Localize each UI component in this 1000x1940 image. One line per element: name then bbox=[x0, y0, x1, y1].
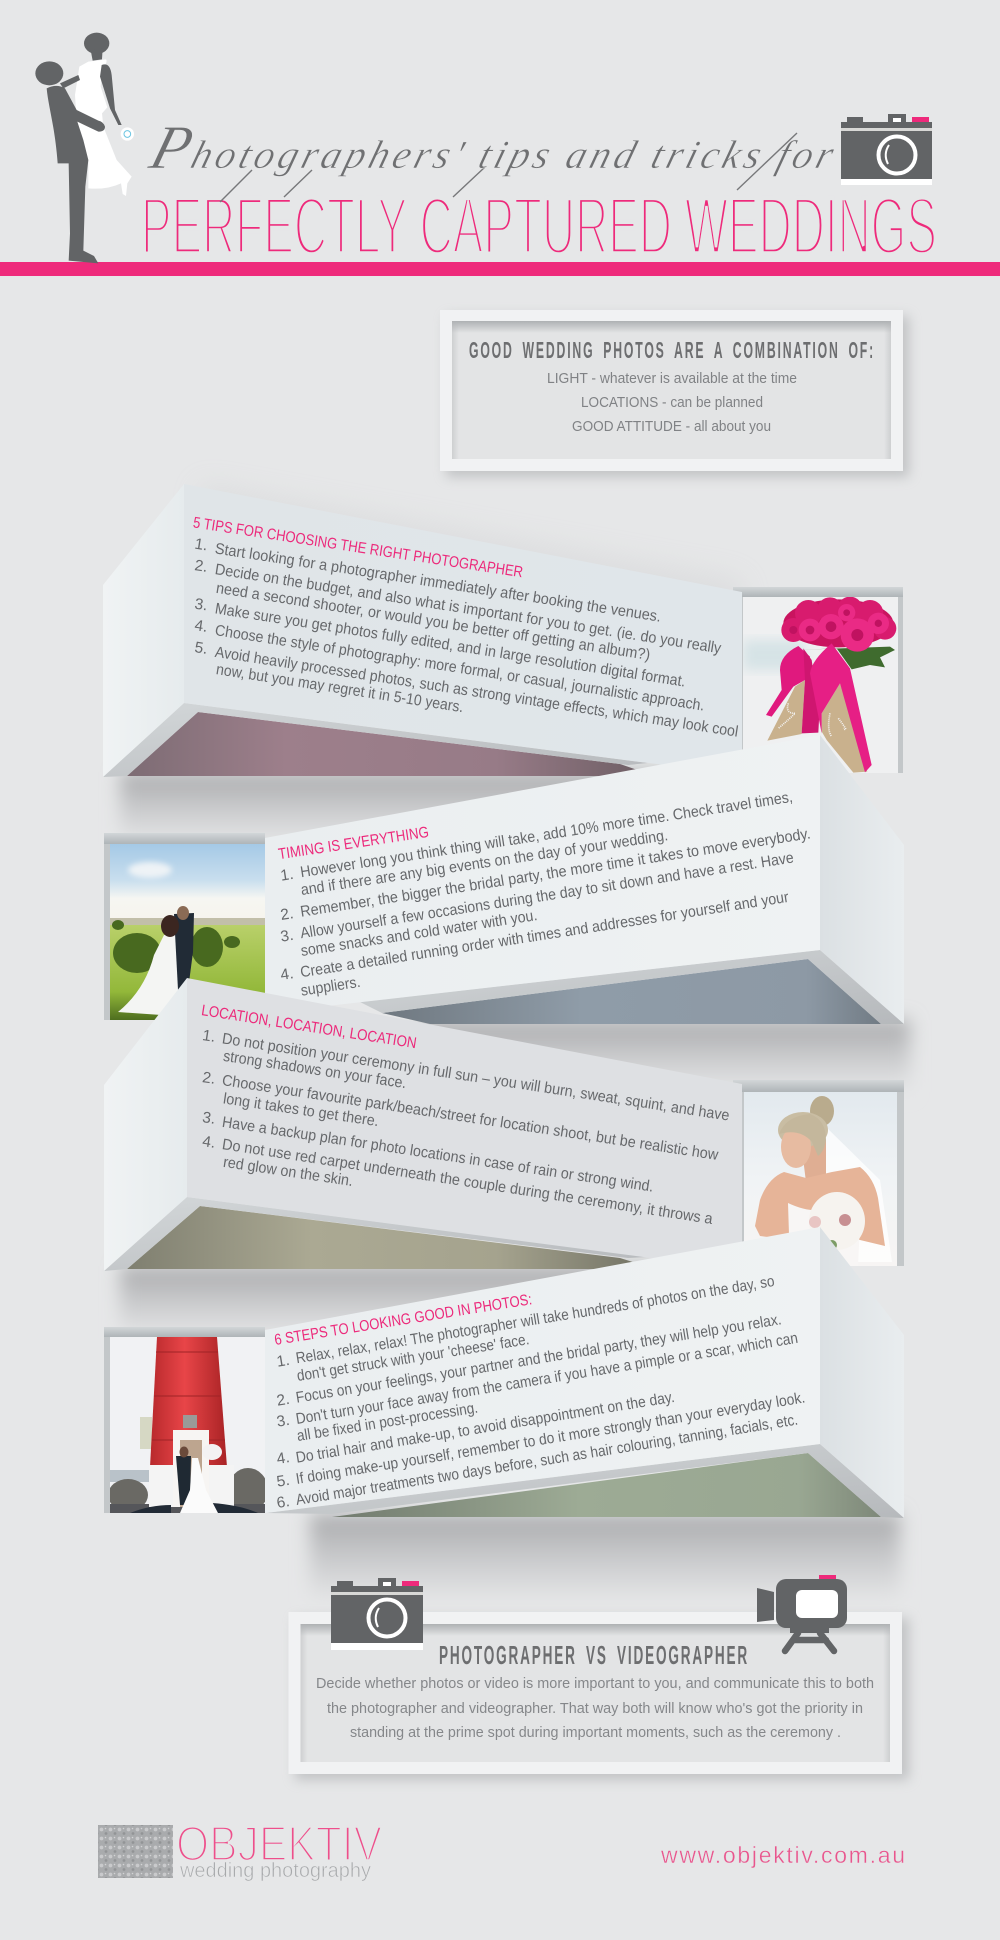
heading: location: LOCATION, LOCATION, LOCATION bbox=[200, 1002, 418, 1052]
photo: pink shoes and bouquet bbox=[733, 587, 903, 773]
tips list: 4. bbox=[193, 617, 209, 636]
steps list: Do trial hair and make-up, to avoid disappointment on the day. bbox=[295, 1389, 676, 1467]
tips list: Decide on the budget, and also what is important for you to get. (ie. do you really bbox=[214, 561, 722, 657]
steps list: Don't turn your face away from the camera if you have a pimple or a scar, which can bbox=[295, 1330, 799, 1428]
text: comparison body bbox=[316, 1675, 874, 1741]
steps list: Focus on your feelings, your partner and the bridal party, they will help you relax. bbox=[295, 1311, 783, 1407]
title: script line: Photographers' tips and tricks for bbox=[142, 113, 845, 182]
tips list: Start looking for a photographer immediately after booking the venues. bbox=[214, 540, 662, 626]
steps list: all be fixed in post-processing. bbox=[296, 1400, 479, 1445]
left face bbox=[104, 978, 187, 1271]
tips list bbox=[193, 536, 739, 741]
photo: red lighthouse bbox=[104, 1327, 268, 1513]
timing list: 3. bbox=[279, 927, 295, 946]
panel: timing is everything bbox=[265, 735, 904, 1024]
heading bar: pink rule bbox=[0, 262, 1000, 276]
timing list: 2. bbox=[279, 905, 295, 924]
icon: wedding couple silhouette bbox=[35, 33, 134, 263]
heading: timing: TIMING IS EVERYTHING bbox=[277, 824, 430, 863]
underside colour bbox=[127, 712, 655, 776]
panel: location, location, location bbox=[104, 978, 742, 1271]
steps list: don't get struck with your 'cheese' face. bbox=[296, 1331, 530, 1385]
left face bbox=[103, 484, 184, 777]
logo tagline: wedding photography bbox=[179, 1860, 371, 1882]
location list: 3. bbox=[201, 1109, 217, 1128]
website url: www.objektiv.com.au bbox=[660, 1842, 905, 1868]
timing list: and if there are any big events on the day of your wedding. bbox=[300, 827, 669, 899]
steps list: 6. bbox=[275, 1493, 291, 1512]
timing list: Create a detailed running order with times and addresses for yourself and your bbox=[299, 889, 790, 981]
location list: Choose your favourite park/beach/street for location shoot, but be realistic how bbox=[221, 1072, 720, 1164]
tips list: now, but you may regret it in 5-10 years. bbox=[215, 661, 465, 716]
text: comparison body: Decide whether photos or video is more important to you, and communicate this to both bbox=[316, 1675, 874, 1692]
timing list: some snacks and cold water with you. bbox=[300, 907, 538, 960]
location list: 1. bbox=[201, 1027, 217, 1046]
timing list: Allow yourself a few occasions during the day to sit down and have a rest. Have bbox=[299, 849, 795, 942]
front face bbox=[265, 1227, 820, 1513]
underside trim bbox=[104, 1197, 648, 1271]
tips list: 2. bbox=[193, 557, 209, 576]
heading: 6 steps: 6 STEPS TO LOOKING GOOD IN PHOTOS: bbox=[273, 1291, 533, 1349]
front face bbox=[265, 735, 820, 1013]
timing list bbox=[279, 789, 812, 1000]
logo mark bbox=[98, 1825, 173, 1878]
timing list: However long you think thing will take, add 10% more time. Check travel times, bbox=[299, 789, 794, 881]
steps list: Relax, relax, relax! The photographer will take hundreds of photos on the day, so bbox=[295, 1273, 776, 1367]
steps list: 4. bbox=[275, 1449, 291, 1468]
panel: 6 steps to looking good in photos bbox=[265, 1227, 904, 1518]
title: perfectly captured weddings: PERFECTLY CAPTURED WEDDINGS bbox=[141, 180, 937, 271]
timing list: suppliers. bbox=[300, 974, 362, 1000]
timing list: 4. bbox=[279, 965, 295, 984]
text: comparison body: standing at the prime spot during important moments, such as the ceremony . bbox=[350, 1724, 841, 1741]
text: comparison body: the photographer and videographer. That way both will know who's got the priority in bbox=[327, 1700, 863, 1717]
underside colour bbox=[127, 1206, 655, 1269]
underside trim bbox=[103, 703, 648, 777]
underside colour bbox=[332, 1453, 881, 1517]
text: locations: LOCATIONS - can be planned bbox=[581, 395, 763, 411]
tips list: 3. bbox=[193, 596, 209, 614]
right face bbox=[820, 735, 904, 1024]
location list: strong shadows on your face. bbox=[222, 1048, 407, 1092]
timing list: 1. bbox=[279, 866, 295, 885]
timing list: Remember, the bigger the bridal party, the more time it takes to move everybody. bbox=[299, 825, 812, 921]
steps list bbox=[275, 1273, 806, 1512]
tips list: Make sure you get photos fully edited, and in large resolution digital format. bbox=[214, 600, 687, 691]
panel: combination box bbox=[440, 310, 909, 477]
heading: 5 tips: 5 TIPS FOR CHOOSING THE RIGHT PHOTOGRAPHER bbox=[192, 514, 524, 581]
steps list: If doing make-up yourself, remember to do it more strongly than your everyday look. bbox=[295, 1389, 806, 1488]
tips list: Avoid heavily processed photos, such as strong vintage effects, which may look cool bbox=[214, 644, 739, 741]
text: good attitude: GOOD ATTITUDE - all about you bbox=[572, 419, 771, 435]
shadow under panels bbox=[120, 484, 910, 1602]
tips list: Choose the style of photography: more formal, or casual, journalistic approach. bbox=[214, 622, 706, 715]
photo: bride portrait bbox=[733, 1080, 904, 1266]
panel: photographer vs videographer bbox=[288, 1612, 909, 1780]
location list: 2. bbox=[201, 1069, 217, 1088]
location list: red glow on the skin. bbox=[222, 1154, 354, 1190]
text: light: LIGHT - whatever is available at the time bbox=[547, 371, 797, 387]
steps list: 3. bbox=[275, 1412, 291, 1431]
tips list: 1. bbox=[193, 536, 209, 554]
icon: camera top bbox=[841, 114, 932, 185]
logo wordmark: OBJEKTIV bbox=[176, 1818, 382, 1872]
icon: camera bottom bbox=[331, 1578, 423, 1650]
icon: video camera bbox=[757, 1575, 847, 1651]
location list: long it takes to get there. bbox=[222, 1090, 380, 1130]
steps list: 5. bbox=[275, 1472, 291, 1491]
right face bbox=[820, 1227, 904, 1518]
underside trim bbox=[360, 950, 904, 1024]
steps list: 1. bbox=[275, 1352, 291, 1371]
tips list: need a second shooter, or would you be better off getting an album?) bbox=[215, 580, 651, 664]
logo: objektiv wedding photography bbox=[98, 1818, 382, 1882]
underside trim bbox=[266, 1444, 904, 1518]
location list: Have a backup plan for photo locations in case of rain or strong wind. bbox=[221, 1114, 655, 1196]
location list: Do not position your ceremony in full sun – you will burn, sweat, squint, and have bbox=[221, 1030, 731, 1125]
underside colour bbox=[382, 959, 881, 1024]
location list: Do not use red carpet underneath the couple during the ceremony, it throws a bbox=[221, 1136, 714, 1228]
front face bbox=[184, 484, 742, 775]
steps list: 2. bbox=[275, 1391, 291, 1410]
location list: 4. bbox=[201, 1133, 217, 1152]
steps list: Avoid major treatments two days before, such as hair colouring, tanning, facials, etc. bbox=[295, 1412, 799, 1509]
panel: 5 tips for choosing the right photographer bbox=[103, 484, 742, 777]
tips list: 5. bbox=[193, 639, 209, 658]
photo: couple in green field bbox=[104, 833, 265, 1020]
front face bbox=[187, 978, 742, 1270]
location list bbox=[201, 1027, 731, 1228]
